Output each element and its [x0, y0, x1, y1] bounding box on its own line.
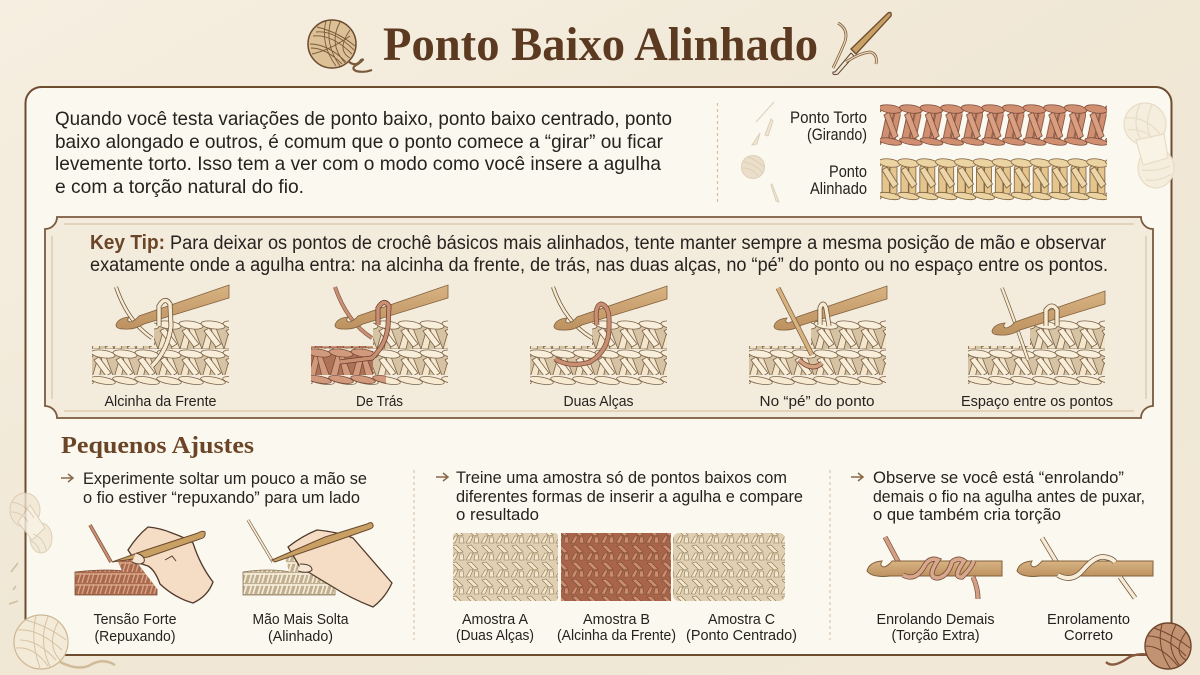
key tip text	[90, 232, 1108, 276]
icon: yarn ball bottom right	[1106, 623, 1191, 669]
label: enrolamento correto	[1047, 611, 1130, 644]
column 2 tip: o resultado	[456, 505, 539, 524]
label: duas alças: Duas Alças	[564, 393, 634, 410]
column 2 tip	[436, 468, 803, 524]
label: no pé do ponto: No “pé” do ponto	[760, 393, 874, 410]
illustration: duas alças	[530, 286, 667, 385]
column 3 tip: demais o fio na agulha antes de puxar,	[873, 487, 1145, 506]
label: tensão forte: Tensão Forte	[94, 611, 176, 628]
icon: crochet hook title	[833, 12, 891, 75]
sample: amostra B	[561, 533, 671, 601]
key tip text: Key Tip:	[90, 232, 165, 254]
icon: yarn ball title	[308, 20, 372, 72]
label: ponto torto: Ponto Torto	[790, 109, 867, 127]
illustration: enrolando demais	[867, 537, 1002, 599]
label: ponto torto: (Girando)	[807, 126, 867, 144]
stitch strip: torto	[880, 103, 1107, 147]
decoration: faded skein top right	[1124, 103, 1174, 188]
intro text	[55, 108, 672, 198]
label: amostra B: Amostra B	[583, 611, 650, 628]
column 3 tip	[851, 468, 1145, 524]
label: amostra C: (Ponto Centrado)	[686, 627, 797, 644]
illustration: alcinha da frente	[92, 285, 229, 385]
illustration: espaço entre os pontos	[968, 288, 1105, 385]
label: mão mais solta: Mão Mais Solta	[252, 611, 349, 628]
illustration: mão mais solta	[243, 520, 392, 607]
column 3 tip: o que também cria torção	[873, 505, 1061, 524]
intro text: Quando você testa variações de ponto baixo, ponto baixo centrado, ponto	[55, 108, 672, 130]
decoration: faded yarn ball bottom left	[14, 615, 115, 669]
heading: pequenos ajustes: Pequenos Ajustes	[61, 433, 254, 459]
intro text: levemente torto. Isso tem a ver com o modo como você insere a agulha	[55, 153, 661, 175]
intro text: e com a torção natural do fio.	[55, 176, 304, 198]
label: alcinha da frente: Alcinha da Frente	[104, 393, 216, 410]
label: mão mais solta: (Alinhado)	[268, 628, 333, 645]
label: amostra A	[456, 611, 534, 644]
label: mão mais solta	[252, 611, 349, 645]
label: ponto torto	[790, 109, 867, 144]
sample: amostra A	[453, 533, 558, 601]
label: enrolamento correto: Enrolamento	[1047, 611, 1130, 628]
key tip text: exatamente onde a agulha entra: na alcinha da frente, de trás, nas duas alças, no “pé” do ponto ou no espaço entre os pontos.	[90, 255, 1108, 276]
label: enrolando demais: Enrolando Demais	[876, 611, 994, 628]
label: amostra C: Amostra C	[708, 611, 775, 628]
illustration: de trás	[311, 285, 448, 385]
intro text: baixo alongado e outros, é comum que o ponto comece a “girar” ou ficar	[55, 131, 663, 153]
sample: amostra C	[673, 533, 785, 601]
column 1 tip: o fio estiver “repuxando” para um lado	[83, 488, 360, 507]
decoration: faded notions	[742, 102, 779, 202]
decoration: faded skein bottom left	[10, 493, 52, 553]
title: Ponto Baixo Alinhado	[383, 18, 818, 71]
label: ponto alinhado	[810, 163, 867, 198]
label: espaço entre os pontos: Espaço entre os pontos	[961, 393, 1113, 410]
decoration: small notions bottom left	[9, 563, 18, 604]
label: ponto alinhado: Ponto	[829, 163, 867, 181]
column 3 tip: Observe se você está “enrolando”	[873, 468, 1124, 487]
key tip text: Para deixar os pontos de crochê básicos mais alinhados, tente manter sempre a mesma posição de mão e observar	[170, 233, 1107, 254]
stitch strip: alinhado	[880, 157, 1107, 201]
label: amostra B	[557, 611, 676, 644]
label: ponto alinhado: Alinhado	[810, 180, 867, 198]
label: amostra A: Amostra A	[462, 611, 528, 628]
column 1 tip	[61, 469, 367, 507]
label: amostra A: (Duas Alças)	[456, 627, 534, 644]
label: enrolando demais	[876, 611, 994, 644]
illustration: tensão forte	[75, 525, 213, 603]
illustration: no pé do ponto	[749, 286, 887, 385]
panel: key tip	[45, 217, 1153, 418]
column 2 tip: Treine uma amostra só de pontos baixos com	[456, 468, 787, 487]
label: enrolando demais: (Torção Extra)	[892, 627, 980, 644]
label: amostra B: (Alcinha da Frente)	[557, 627, 676, 644]
illustration: enrolamento correto	[1017, 538, 1153, 598]
column 1 tip: Experimente soltar um pouco a mão se	[83, 469, 367, 488]
label: amostra C	[686, 611, 797, 644]
column 2 tip: diferentes formas de inserir a agulha e compare	[456, 487, 803, 506]
label: de trás: De Trás	[356, 393, 403, 410]
label: tensão forte: (Repuxando)	[94, 628, 176, 645]
label: enrolamento correto: Correto	[1064, 627, 1113, 644]
label: tensão forte	[94, 611, 176, 645]
